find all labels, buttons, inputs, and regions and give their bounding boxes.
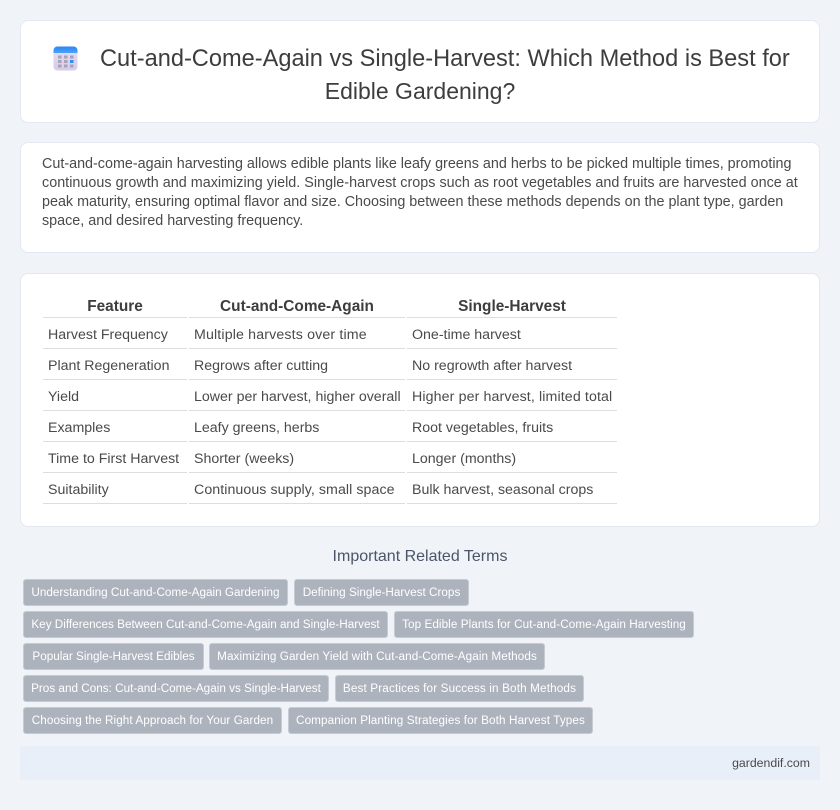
comparison table: Time to First Harvest [48, 450, 179, 466]
chips: related terms [23, 579, 694, 734]
panel: header [20, 20, 820, 123]
comparison table: Feature [87, 298, 143, 314]
comparison table: Lower per harvest, higher overall [194, 388, 401, 404]
chip: Understanding Cut-and-Come-Again Gardening [31, 586, 280, 599]
intro text: space, and desired harvesting frequency. [42, 213, 303, 229]
chip: Choosing the Right Approach for Your Garden [32, 714, 273, 727]
comparison table: Bulk harvest, seasonal crops [412, 482, 593, 498]
intro text: Cut-and-come-again harvesting allows edible plants like leafy greens and herbs to be picked multiple times, promoting [42, 156, 791, 172]
title: Edible Gardening? [325, 78, 515, 104]
panel: footer [20, 746, 820, 780]
comparison table: Single-Harvest [458, 298, 566, 314]
comparison table: Multiple harvests over time [194, 326, 367, 342]
chip [23, 675, 329, 702]
chip [209, 643, 545, 670]
title: Cut-and-Come-Again vs Single-Harvest: Which Method is Best for [100, 46, 790, 72]
chip: Best Practices for Success in Both Methods [343, 682, 576, 695]
chip [23, 611, 388, 638]
heading: related terms: Important Related Terms [333, 548, 507, 565]
comparison table [43, 298, 617, 504]
comparison table: Leafy greens, herbs [194, 420, 319, 436]
comparison table: Harvest Frequency [48, 326, 168, 342]
chip [23, 643, 204, 670]
chip: Companion Planting Strategies for Both Harvest Types [296, 714, 585, 727]
panel: introduction [20, 142, 820, 253]
comparison table: Root vegetables, fruits [412, 420, 553, 436]
comparison table: One-time harvest [412, 326, 521, 342]
chip: Popular Single-Harvest Edibles [32, 650, 195, 663]
comparison table: Continuous supply, small space [194, 482, 395, 498]
comparison table: Cut-and-Come-Again [220, 298, 374, 314]
chip [23, 579, 288, 606]
chip: Defining Single-Harvest Crops [303, 586, 460, 599]
comparison table: Yield [48, 388, 79, 404]
comparison table: Higher per harvest, limited total [412, 388, 612, 404]
comparison table: Shorter (weeks) [194, 450, 294, 466]
chip: Pros and Cons: Cut-and-Come-Again vs Single-Harvest [31, 682, 321, 695]
comparison table: No regrowth after harvest [412, 358, 572, 374]
chip: Top Edible Plants for Cut-and-Come-Again Harvesting [402, 618, 686, 631]
intro text [42, 156, 798, 229]
comparison table: Regrows after cutting [194, 358, 328, 374]
chip [23, 707, 282, 734]
chip [394, 611, 694, 638]
chip [294, 579, 469, 606]
intro text: peak maturity, ensuring optimal flavor and size. Choosing between these methods depends on the plant type, garden [42, 194, 783, 210]
comparison table: Suitability [48, 482, 109, 498]
panel: comparison table [20, 273, 820, 527]
icon: calendar [54, 46, 78, 70]
comparison table: Examples [48, 420, 110, 436]
source: gardendif.com [732, 756, 810, 770]
chip: Key Differences Between Cut-and-Come-Again and Single-Harvest [31, 618, 380, 631]
chip [335, 675, 584, 702]
comparison table: Plant Regeneration [48, 358, 169, 374]
title [100, 46, 790, 104]
comparison table: Longer (months) [412, 450, 516, 466]
chip [288, 707, 593, 734]
intro text: continuous growth and maximizing yield. Single-harvest crops such as root vegetables and fruits are harvested once at [42, 175, 798, 191]
chip: Maximizing Garden Yield with Cut-and-Come-Again Methods [217, 650, 537, 663]
